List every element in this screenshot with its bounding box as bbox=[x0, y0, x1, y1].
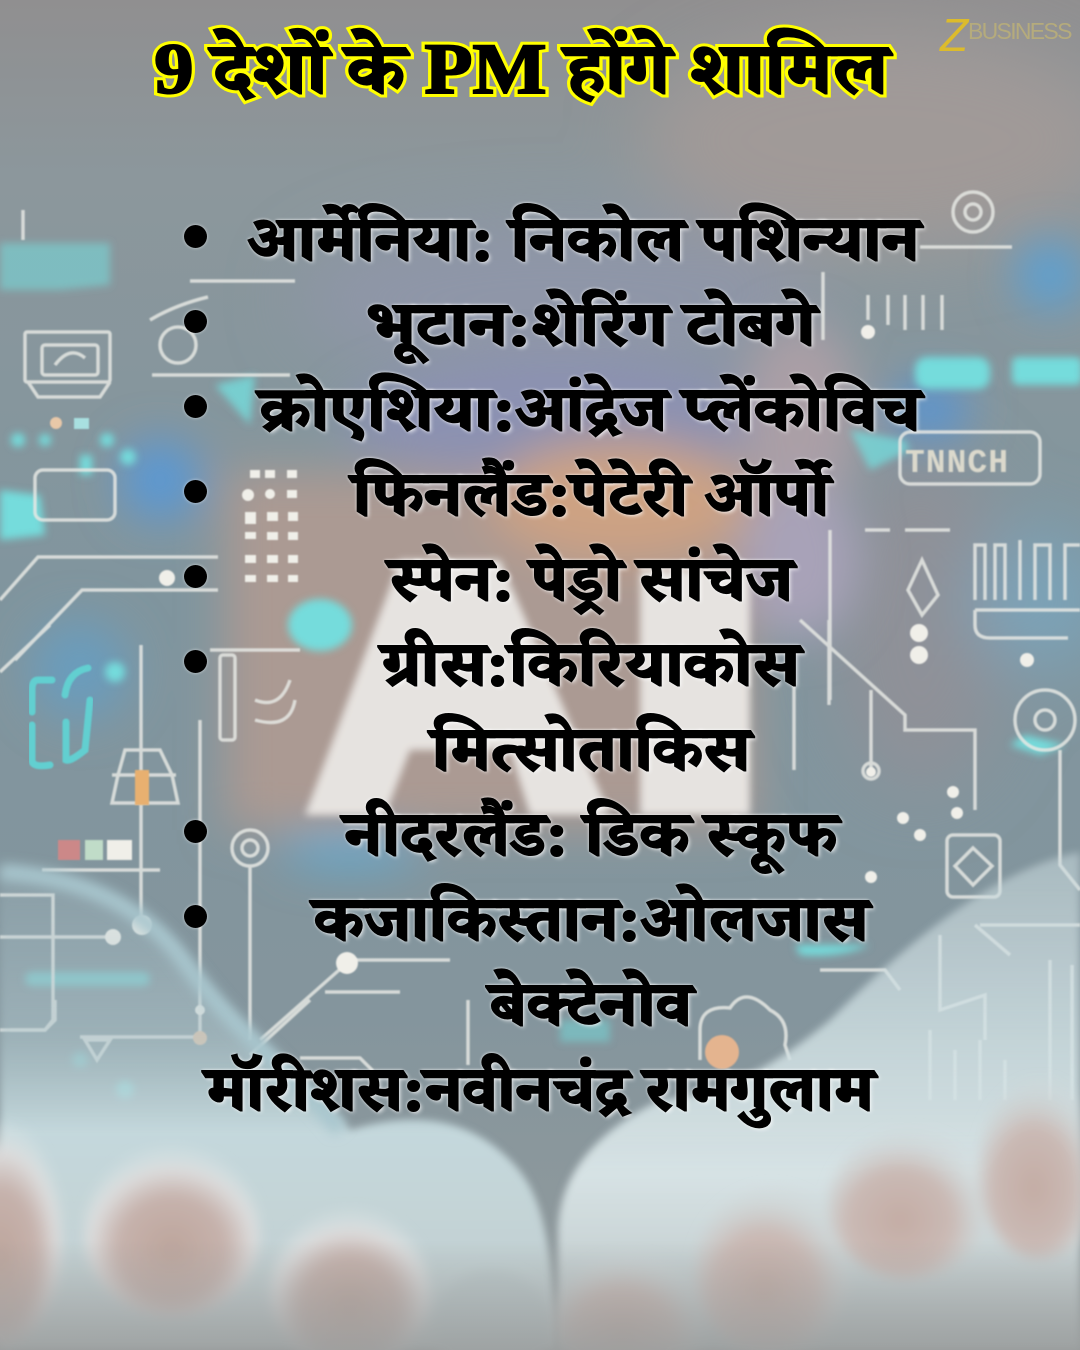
line: Kazakhstan continued: बेक्टेनोव bbox=[490, 971, 692, 1039]
CO glyphs bbox=[32, 668, 90, 766]
circuit lines bbox=[0, 192, 1080, 1100]
bullet 2 bbox=[184, 310, 207, 333]
line: Bhutan: भूटान:शेरिंग टोबगे bbox=[367, 291, 815, 359]
title: 9 देशों के PM होंगे शामिल bbox=[154, 29, 888, 109]
logo bbox=[939, 9, 1072, 61]
line: Netherlands: नीदरलैंड: डिक स्कूफ bbox=[345, 801, 837, 869]
bullet 6 bbox=[184, 650, 207, 673]
AI lettering bbox=[305, 560, 750, 815]
bullet 7 bbox=[184, 820, 207, 843]
bullet 5 bbox=[184, 565, 207, 588]
line: Greece: ग्रीस:किरियाकोस bbox=[382, 631, 800, 699]
left hand edge highlight bbox=[0, 872, 340, 1130]
soft colour fields bbox=[300, 30, 1080, 790]
bullet 8 bbox=[184, 905, 207, 928]
bullet 3 bbox=[184, 395, 207, 418]
line: Spain: स्पेन: पेड्रो सांचेज bbox=[389, 546, 793, 614]
fingers bbox=[0, 1080, 1080, 1350]
right hand bbox=[558, 852, 1080, 1350]
label: TNNCH: TNNCH bbox=[905, 445, 1009, 482]
circuit nodes and lights bbox=[50, 325, 1034, 1069]
bullet 4 bbox=[184, 480, 207, 503]
line: Finland: फिनलैंड:पेटेरी ऑर्पो bbox=[353, 461, 829, 529]
line: Greece continued: मित्सोताकिस bbox=[432, 716, 750, 784]
line: Mauritius: मॉरीशस:नवीनचंद्र रामगुलाम bbox=[206, 1056, 874, 1124]
left hand bbox=[0, 868, 556, 1350]
line: Kazakhstan: कजाकिस्तान:ओलजास bbox=[314, 886, 868, 954]
line: Croatia: क्रोएशिया:आंद्रेज प्लेंकोविच bbox=[260, 376, 920, 444]
list: prime ministers bbox=[182, 200, 928, 1130]
logo: Z bbox=[940, 9, 968, 61]
cyan glows bbox=[0, 243, 1080, 1099]
bullet 1 bbox=[184, 225, 207, 248]
bottom shade bbox=[0, 1240, 1080, 1350]
logo: BUSINESS bbox=[968, 18, 1071, 44]
line: Armenia: आर्मेनिया: निकोल पशिन्यान bbox=[248, 206, 919, 274]
